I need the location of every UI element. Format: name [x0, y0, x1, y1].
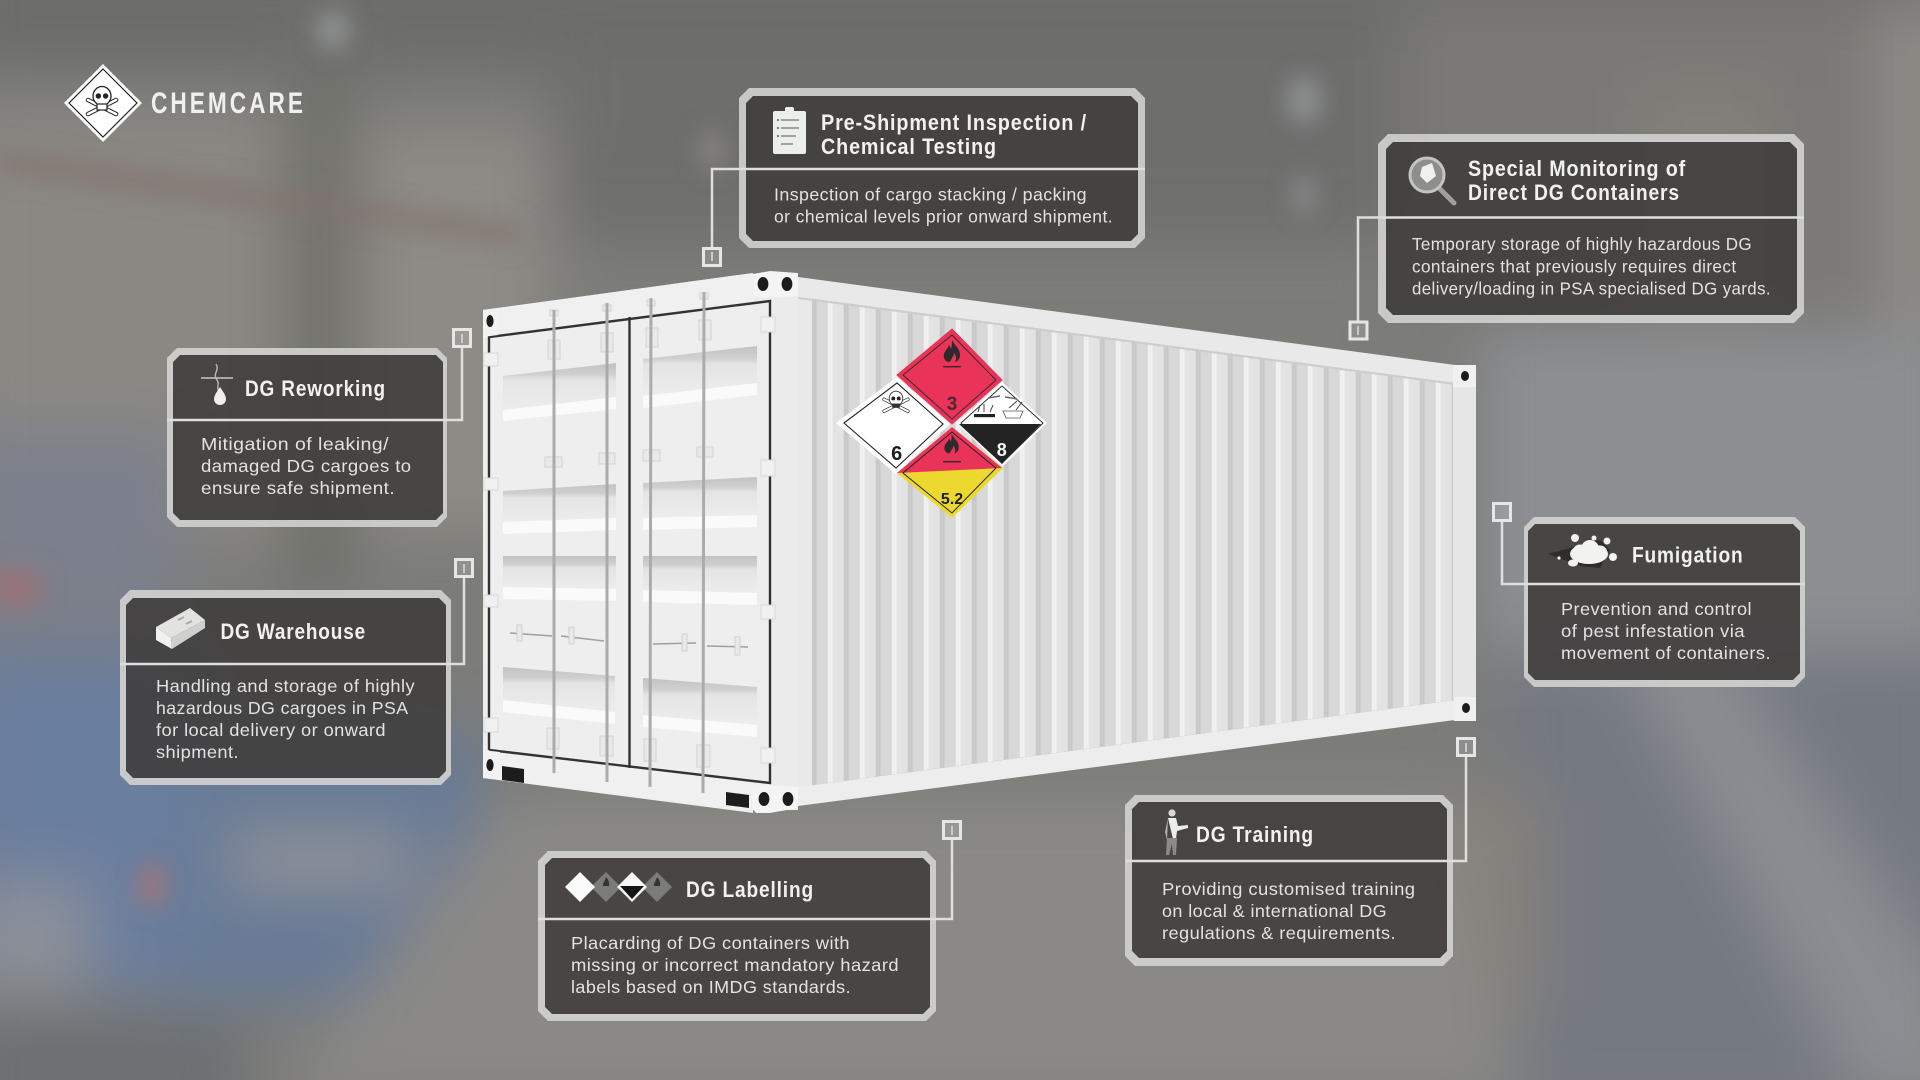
connector line and marker	[120, 560, 472, 664]
description	[201, 434, 412, 498]
placard: class 6 toxic: 6	[891, 443, 902, 465]
locking rods	[554, 292, 704, 793]
brand name: CHEMCARE	[151, 87, 306, 120]
heading: Fumigation	[1632, 542, 1744, 568]
hazard placard cluster	[836, 329, 1047, 518]
description: Prevention and control	[1561, 599, 1752, 619]
icon: clipboard	[773, 107, 806, 154]
panel: DG labelling	[538, 822, 960, 1021]
panel: pre-shipment inspection	[704, 88, 1145, 266]
description: or chemical levels prior onward shipment.	[774, 206, 1113, 226]
placard: class 3 flammable	[897, 329, 1002, 424]
description: Providing customised training	[1162, 879, 1416, 899]
description: delivery/loading in PSA specialised DG yards.	[1412, 278, 1771, 298]
heading: DG Training	[1196, 822, 1314, 847]
placard: class 6 toxic	[836, 377, 950, 474]
heading: Direct DG Containers	[1468, 180, 1680, 205]
description: for local delivery or onward	[156, 720, 386, 740]
description: on local & international DG	[1162, 901, 1387, 921]
description: Temporary storage of highly hazardous DG	[1412, 234, 1752, 254]
description: damaged DG cargoes to	[201, 456, 412, 476]
description	[1162, 879, 1416, 943]
heading: DG Labelling	[686, 877, 814, 902]
icon: leaking drop	[201, 364, 233, 405]
description: Placarding of DG containers with	[571, 933, 850, 953]
placard: class 5.2 organic peroxide	[897, 427, 1003, 518]
description: shipment.	[156, 742, 239, 762]
connector line and marker	[704, 169, 1145, 266]
panel: fumigation	[1494, 504, 1805, 687]
heading: DG Warehouse	[220, 619, 366, 644]
door lock brackets	[545, 293, 713, 767]
logo: Chemcare	[64, 64, 306, 142]
panel: DG reworking	[167, 330, 470, 527]
container: dangerous goods shipping container	[483, 271, 1476, 813]
description: movement of containers.	[1561, 643, 1771, 663]
description: of pest infestation via	[1561, 621, 1745, 641]
placard: class 8 corrosive	[957, 382, 1047, 467]
description	[1412, 234, 1771, 298]
container side wall	[798, 297, 1455, 787]
panel: DG warehouse	[120, 560, 472, 785]
description: missing or incorrect mandatory hazard	[571, 955, 899, 975]
heading: Special Monitoring of	[1468, 156, 1686, 181]
corner castings	[483, 271, 1476, 813]
icon: trainer figure	[1165, 809, 1188, 855]
door hinges	[484, 317, 775, 763]
description	[156, 676, 415, 762]
container front face	[483, 273, 753, 813]
description: labels based on IMDG standards.	[571, 977, 851, 997]
description: hazardous DG cargoes in PSA	[156, 698, 408, 718]
icon: warehouse	[156, 608, 205, 649]
description	[1561, 599, 1771, 663]
connector line and marker	[1350, 218, 1804, 339]
icon: four hazard labels	[565, 872, 672, 902]
heading: DG Reworking	[245, 376, 386, 401]
description: Mitigation of leaking/	[201, 434, 389, 454]
heading	[1468, 156, 1686, 205]
description: containers that previously requires direct	[1412, 256, 1736, 276]
connector line and marker	[1125, 738, 1474, 861]
description: regulations & requirements.	[1162, 923, 1396, 943]
description	[774, 184, 1113, 226]
heading	[821, 110, 1087, 159]
description: Inspection of cargo stacking / packing	[774, 184, 1087, 204]
connector line and marker	[1494, 504, 1805, 584]
panel: special monitoring	[1350, 134, 1804, 339]
heading: Chemical Testing	[821, 134, 997, 159]
placard: class 5.2 organic peroxide: 5.2	[941, 491, 963, 508]
description: ensure safe shipment.	[201, 478, 395, 498]
door handles	[510, 625, 748, 655]
placard: class 3 flammable: 3	[947, 394, 957, 415]
door frame lines	[489, 301, 770, 783]
description	[571, 933, 899, 997]
heading: Pre-Shipment Inspection /	[821, 110, 1087, 135]
icon: fumigation cloud	[1548, 534, 1617, 568]
door recess bands	[503, 346, 757, 737]
connector line and marker	[167, 330, 470, 420]
connector line and marker	[538, 822, 960, 919]
placard: class 8 corrosive: 8	[997, 440, 1007, 460]
panel: DG training	[1125, 738, 1474, 966]
description: Handling and storage of highly	[156, 676, 415, 696]
icon: magnifier	[1410, 158, 1454, 203]
icon: skull diamond	[64, 64, 142, 142]
